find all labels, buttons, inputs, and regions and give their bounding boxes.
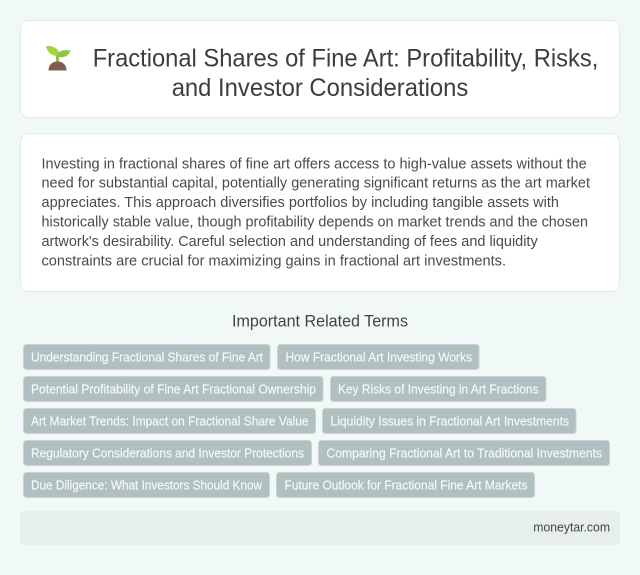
footer source text: moneytar.com (533, 521, 610, 535)
tag (330, 376, 546, 402)
tag: Liquidity Issues in Fractional Art Investments (330, 414, 569, 428)
tag: Future Outlook for Fractional Fine Art Markets (284, 478, 528, 492)
panel: related term tags (24, 344, 610, 498)
tag: Comparing Fractional Art to Traditional Investments (326, 446, 602, 460)
icon: sprout (46, 46, 70, 70)
title: and Investor Considerations (172, 74, 468, 102)
summary text block: historically stable value, though profitability depends on market trends and the chosen (42, 214, 588, 230)
heading: important related terms: Important Related Terms (232, 313, 408, 331)
tag: Due Diligence: What Investors Should Know (31, 478, 263, 492)
summary text block: appreciates. This approach diversifies portfolios by including tangible assets with (42, 195, 559, 211)
tag: How Fractional Art Investing Works (286, 350, 472, 364)
title: Fractional Shares of Fine Art: Profitability, Risks, (93, 45, 598, 73)
footer bar (20, 511, 620, 545)
tag (322, 408, 576, 434)
panel: summary card (20, 134, 620, 292)
summary text block: need for substantial capital, potentially generating significant returns as the art market (42, 176, 590, 192)
tag (24, 440, 312, 466)
tag (24, 472, 270, 498)
tag: Potential Profitability of Fine Art Fractional Ownership (31, 382, 316, 396)
tag: Key Risks of Investing in Art Fractions (338, 382, 539, 396)
tag (276, 472, 534, 498)
tag: Art Market Trends: Impact on Fractional Share Value (31, 414, 308, 428)
summary text block (42, 156, 590, 269)
tag (318, 440, 610, 466)
tag: Understanding Fractional Shares of Fine Art (31, 350, 263, 364)
panel: title card (20, 20, 620, 118)
summary text block: constraints are crucial for maximizing gains in fractional art investments. (42, 253, 506, 269)
tag (24, 376, 323, 402)
tag (278, 344, 479, 370)
summary text block: Investing in fractional shares of fine art offers access to high-value assets without the (42, 156, 587, 172)
tag: Regulatory Considerations and Investor Protections (31, 446, 304, 460)
tag (24, 408, 316, 434)
summary text block: artwork's desirability. Careful selection and understanding of fees and liquidity (42, 234, 538, 250)
tag (24, 344, 270, 370)
title (93, 45, 598, 102)
